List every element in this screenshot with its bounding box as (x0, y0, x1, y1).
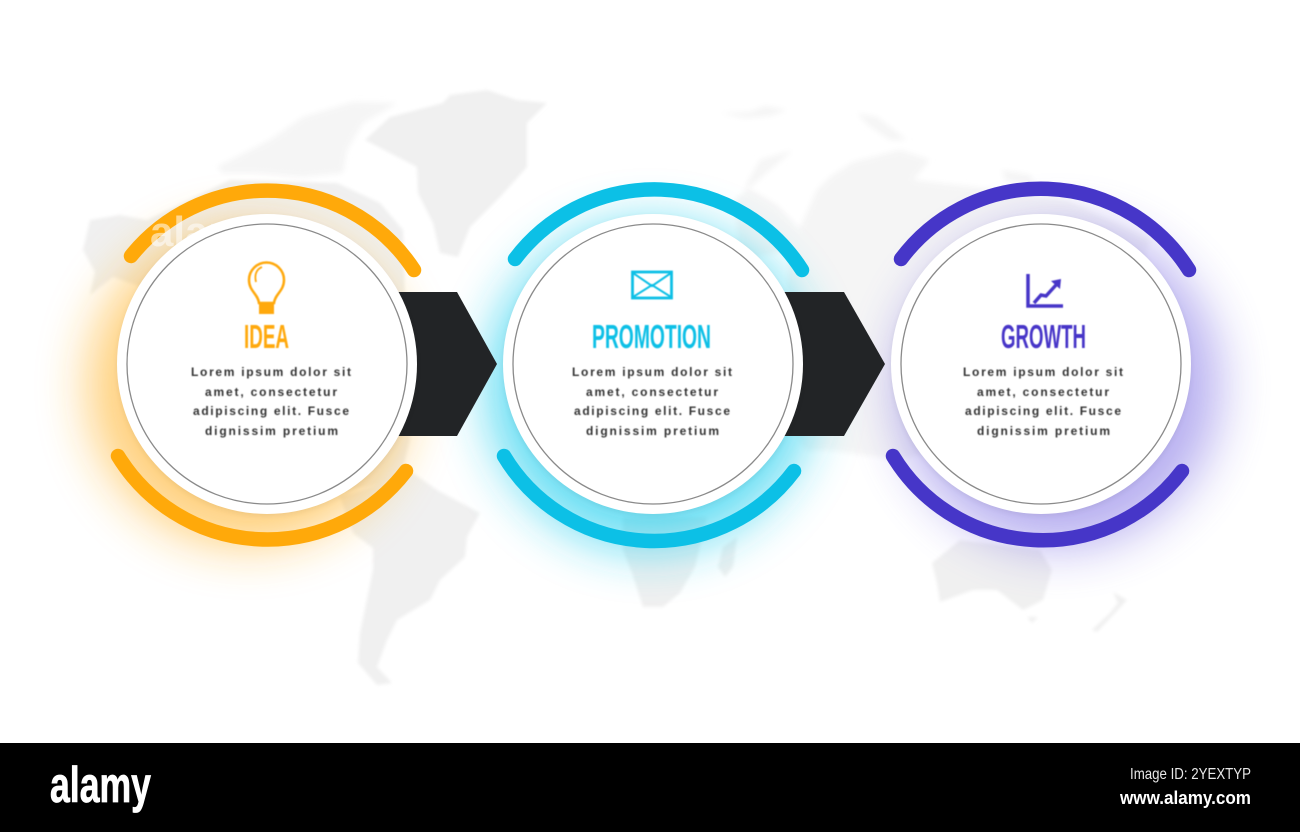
idea arcs (118, 191, 414, 539)
arrow: promotion to growth (782, 292, 885, 436)
growth arcs (893, 189, 1189, 540)
idea body text: dignissim pretium (205, 424, 338, 438)
footer logo: alamy (50, 757, 151, 813)
promotion white circle (503, 214, 803, 516)
glow: orange (88, 226, 408, 546)
footer url: www.alamy.com (1119, 788, 1251, 808)
promotion arcs (504, 189, 802, 541)
glow: purple (896, 224, 1220, 548)
arrow: idea to promotion (395, 292, 497, 436)
growth body text (963, 365, 1123, 438)
footer image id: Image ID: 2YEXTYP (1130, 766, 1251, 783)
idea body text: adipiscing elit. Fusce (193, 404, 349, 418)
promotion body text: adipiscing elit. Fusce (574, 404, 730, 418)
watermark: alamy fragment: alamy (150, 208, 270, 255)
promotion body text: dignissim pretium (586, 424, 719, 438)
heading: idea: IDEA (244, 318, 289, 355)
growth white circle (891, 214, 1191, 516)
panel: growth (891, 189, 1191, 540)
panel: idea (117, 191, 417, 539)
promotion body text (572, 365, 732, 438)
growth body text: dignissim pretium (977, 424, 1110, 438)
heading: promotion: PROMOTION (592, 318, 711, 355)
promotion body text: amet, consectetur (586, 385, 718, 399)
icon: envelope (632, 272, 672, 298)
idea body text (191, 365, 351, 438)
icon: light bulb (249, 263, 284, 314)
idea white circle (117, 214, 417, 516)
growth body text: Lorem ipsum dolor sit (963, 365, 1123, 379)
growth body text: adipiscing elit. Fusce (965, 404, 1121, 418)
glow: blue (486, 222, 814, 550)
idea body text: Lorem ipsum dolor sit (191, 365, 351, 379)
icon: growth chart (1028, 274, 1063, 306)
footer bar (0, 743, 1300, 832)
idea body text: amet, consectetur (205, 385, 337, 399)
world map background (83, 90, 1150, 685)
growth body text: amet, consectetur (977, 385, 1109, 399)
heading: growth: GROWTH (1001, 318, 1086, 355)
panel: promotion (503, 189, 803, 541)
promotion body text: Lorem ipsum dolor sit (572, 365, 732, 379)
